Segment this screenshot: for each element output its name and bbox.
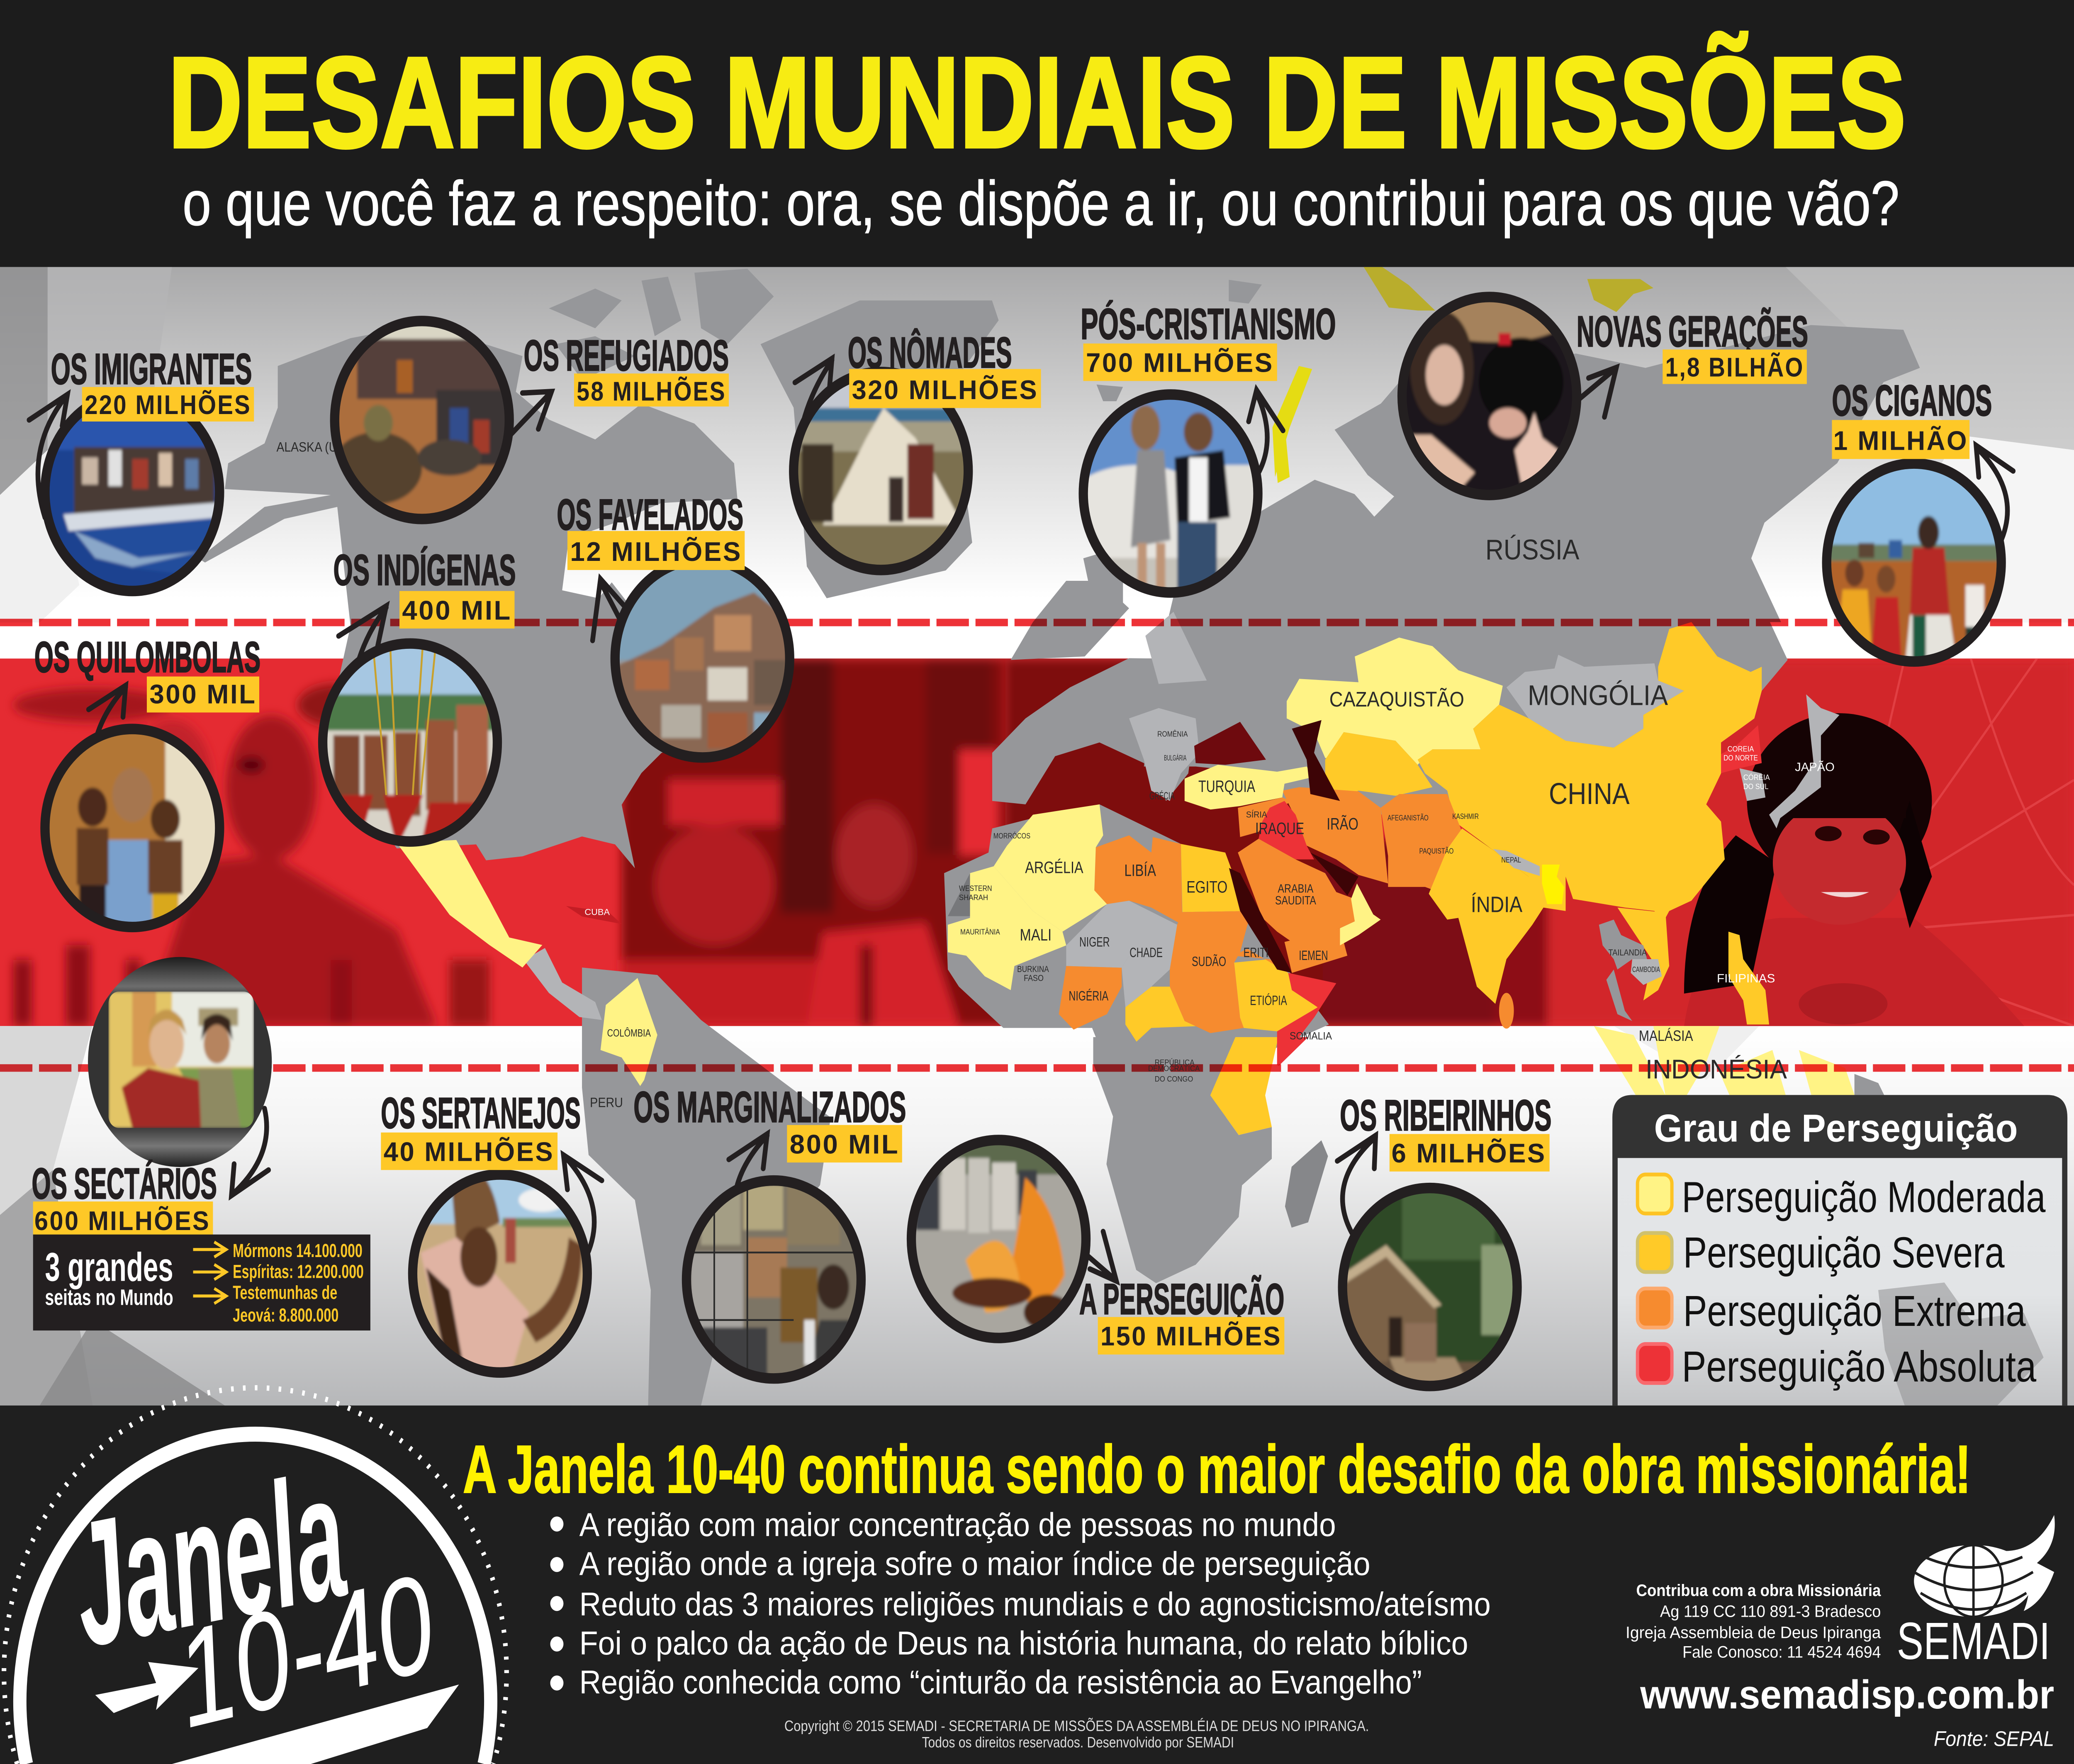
map: country labels: SÍRIA [1246,809,1267,820]
label: os ribeirinhos: OS RIBEIRINHOS [1340,1091,1551,1140]
label: os sectários: 600 MILHÕES [34,1206,210,1236]
map: country labels: CHADE [1130,945,1163,960]
map: country labels: ARABIA [1278,882,1314,895]
map: country labels: ÍNDIA [1471,892,1522,917]
country: Nepal [1493,849,1540,876]
map: Colombia [601,978,657,1086]
map: country labels: JAPÃO [1795,760,1835,774]
panel: upper map background [0,267,2074,660]
map: country labels: MAURITÂNIA [960,928,1000,936]
photo: girl on the right [1684,713,2024,1026]
photo: oceans [1005,658,2074,1026]
label: os indígenas: OS INDÍGENAS [333,546,516,594]
panel: three great sects: Jeová: 8.800.000 [233,1305,338,1326]
arrow: ribeirinhos [1337,1135,1375,1238]
divider: upper dashed line [0,621,2074,624]
label: os imigrantes [51,345,254,422]
label: os quilombolas: 300 MIL [149,679,257,710]
country: Kazakhstan [1287,638,1503,765]
map: country labels: SAUDITA [1275,894,1317,907]
map: country labels: NEPAL [1501,856,1521,864]
country: Syria [1238,797,1292,837]
map: country labels: DO CONGO [1155,1075,1193,1083]
label: os nômades [848,328,1041,408]
subtitle: o que você faz a respeito: ora, se dispõe a ir, ou contribui para os que vão? [183,168,1899,239]
photo circle: os indígenas [317,638,503,848]
panel: three great sects: Espíritas: 12.200.000 [233,1261,364,1282]
panel: red band with photographs [0,658,2074,1026]
country: Libya [1094,835,1182,925]
copyright [784,1718,1369,1751]
divider: lower dashed line [0,1067,2074,1069]
photo circle: os favelados [609,555,800,765]
bullet list: Região conhecida como “cinturão da resistência ao Evangelho” [579,1664,1422,1701]
country: China [1418,622,1762,925]
photo circle: os imigrantes [40,383,225,600]
map: country labels: BULGÁRIA [1164,754,1187,762]
contact details [1626,1581,1882,1661]
country: central Asia [1325,732,1432,801]
map: country labels: ARGÉLIA [1025,858,1083,877]
panel: footer background [0,1406,2074,1764]
photo circle: os nômades [794,372,972,575]
copyright: Todos os direitos reservados. Desenvolvido por SEMADI [922,1734,1234,1751]
label: novas gerações: 1,8 BILHÃO [1665,352,1804,383]
map: country labels: INDONÉSIA [1646,1054,1787,1084]
map: country labels: DO SUL [1743,782,1768,791]
arrow: favelados [593,579,644,666]
country: Iraq [1259,801,1314,860]
arrow: pós-cristianismo [1235,390,1283,501]
legend: grau de perseguição: Grau de Perseguição [1654,1106,2018,1150]
label: pós-cristianismo: PÓS-CRISTIANISMO [1081,300,1336,348]
map: Indonesia [1594,1026,1885,1107]
arrow: sertanejos [563,1155,602,1260]
photo circle: os quilombolas [40,728,225,938]
label: novas gerações: NOVAS GERAÇÕES [1577,307,1808,356]
arrow: nômades [795,358,832,495]
icon: white swoosh [172,1684,459,1764]
label: os nômades: OS NÔMADES [848,328,1012,377]
label: os refugiados [524,331,729,407]
icon: yellow arrows [193,1242,226,1304]
map: country labels: PAQUISTÃO [1419,846,1453,855]
label: a perseguição: A PERSEGUIÇÃO [1079,1275,1284,1323]
country: Sri Lanka [1499,993,1514,1028]
sea: Persian Gulf [1310,853,1358,896]
map: country labels: CUBA [584,907,610,917]
legend: grau de perseguição [1612,1095,2067,1406]
map: Cuba [566,906,622,924]
label: os ciganos [1832,376,1992,459]
contact details: Fale Conosco: 11 4524 4694 [1682,1642,1881,1661]
photo circle: a perseguição [906,1135,1091,1345]
label: os refugiados: 58 MILHÕES [577,376,726,407]
panel: three great sects: 3 grandes [45,1245,173,1290]
label: os sertanejos: 40 MILHÕES [384,1137,554,1167]
map: country labels: EGITO [1186,877,1227,896]
country: Yemen [1285,928,1347,973]
map: Latin America [582,967,831,1406]
copyright: Copyright © 2015 SEMADI - SECRETARIA DE MISSÕES DA ASSEMBLÉIA DE DEUS NO IPIRANGA. [784,1718,1369,1735]
contact details: Igreja Assembleia de Deus Ipiranga [1626,1623,1881,1642]
label: os marginalizados: 800 MIL [790,1129,899,1160]
map: country labels: MALI [1020,926,1052,944]
legend: absolute: Perseguição Absoluta [1682,1342,2036,1391]
label: os indígenas [333,546,516,629]
label: os sertanejos [381,1089,581,1170]
map: country labels: BURKINA [1017,964,1049,974]
map: country labels: COREIA [1728,745,1754,753]
main title: DESAFIOS MUNDIAIS DE MISSÕES [168,31,1906,175]
label: os sertanejos: OS SERTANEJOS [381,1089,581,1137]
map: country labels: NIGER [1079,934,1110,950]
arrow: refugiados [496,392,552,450]
map: Russia and Europe north [1083,280,1920,622]
country: Egypt [1181,844,1251,912]
map: Eurasia and Africa [944,581,1839,1120]
arrow: ciganos [1976,446,2013,546]
photo: red umbrella lines [1888,658,2074,1026]
map: country labels: CHINA [1549,777,1630,811]
photo circle: os ciganos [1823,458,2008,669]
badge: Janela 10-40: 10-40 [165,1545,446,1757]
panel: header background [0,0,2074,267]
photo circle: os refugiados [331,315,516,525]
map: country labels: NIGÉRIA [1069,988,1109,1004]
map: Mexico [397,840,542,967]
sea: Black Sea [1194,722,1266,765]
map: country labels: MORRÓCOS [993,832,1030,840]
label: os imigrantes: OS IMIGRANTES [51,345,252,393]
badge: dotted outer ring [4,1388,506,1764]
country: Somalia [1277,973,1336,1066]
map: country labels: ETIÓPIA [1250,993,1287,1008]
country: India [1429,828,1565,1004]
map: country labels: SOMALIA [1290,1030,1332,1042]
label: os favelados: OS FAVELADOS [557,490,743,539]
country: Mali and Mauritania [948,866,1066,990]
label: os nômades: 320 MILHÕES [852,375,1038,405]
photo: faces on the left [13,684,489,1026]
legend: severe: Perseguição Severa [1683,1228,2005,1277]
arrow: novas gerações [1560,368,1616,417]
country: Bangladesh [1542,865,1564,904]
legend: moderate: Perseguição Moderada [1682,1173,2045,1221]
photo circle: pós-cristianismo [1058,390,1263,603]
photo circle: os sectários [88,957,272,1167]
label: pós-cristianismo [1081,300,1336,381]
label: os ciganos: 1 MILHÃO [1833,426,1968,456]
label: pós-cristianismo: 700 MILHÕES [1086,348,1274,378]
map: country labels: ALASKA (U [276,439,337,455]
map: Central America [524,948,602,1020]
country: Indochina [1617,908,1669,1000]
map: country labels: AFEGANISTÃO [1388,814,1429,822]
label: a perseguição: 150 MILHÕES [1100,1321,1282,1352]
country: Oman [1340,884,1381,945]
country: Afghanistan and Pakistan [1381,794,1462,894]
label: os sectários [32,1160,217,1236]
map: country labels: KASHMIR [1452,812,1479,821]
country: Central African Republic [1125,987,1196,1042]
source: Fonte: SEPAL [1934,1727,2054,1751]
map: country labels: DO NORTE [1723,754,1758,762]
label: os favelados [557,490,745,570]
bullet list: A região com maior concentração de pessoas no mundo [579,1506,1336,1543]
bullet list: Reduto das 3 maiores religiões mundiais e do agnosticismo/ateísmo [579,1586,1491,1623]
map: North Africa grey base [944,804,1329,1120]
map: country labels: CAZAQUISTÃO [1329,687,1464,711]
legend: Australia behind the panel [1878,1282,2044,1406]
map: country labels: IEMEN [1299,948,1328,963]
map: country labels: RÚSSIA [1485,534,1580,565]
bullet list: Foi o palco da ação de Deus na história humana, do relato bíblico [579,1625,1468,1662]
label: os ribeirinhos [1340,1091,1551,1172]
arrow: indígenas [338,606,386,697]
label: os ciganos: OS CIGANOS [1832,376,1992,425]
label: os ribeirinhos: 6 MILHÕES [1392,1138,1546,1169]
photo circle: os sertanejos [410,1162,595,1380]
country: Saudi Arabia [1238,839,1355,942]
country: Nigeria [1059,966,1122,1030]
map: country labels: TAILANDIA [1609,948,1647,958]
map: country labels: WESTERN [959,884,992,893]
label: os imigrantes: 220 MILHÕES [85,390,251,420]
country: Mongolia [1507,655,1684,748]
map: country labels: COLÔMBIA [607,1027,651,1039]
photo: child in the centre [622,658,1005,1026]
arrow: perseguição [1059,1231,1116,1281]
map: country labels: FASO [1024,973,1044,983]
map: country labels: FILIPINAS [1717,972,1775,985]
country: Cambodia [1631,959,1662,985]
map: country labels: DEMOCRÁTICA [1148,1065,1200,1073]
map: persecution colours [948,622,1769,1066]
country: Iran [1282,787,1388,884]
bullet list [550,1506,1491,1701]
map: country labels: PERU [590,1095,623,1110]
badge: Janela 10-40: Janela [60,1436,358,1684]
map: country labels: ERITI [1243,945,1268,960]
map: country labels: IRÃO [1327,814,1358,833]
map: country labels: GRÉCIA [1149,790,1175,802]
label: os indígenas: 400 MIL [402,595,512,626]
label: os marginalizados: OS MARGINALIZADOS [633,1083,906,1131]
badge: Janela 10-40 [4,1388,506,1764]
map: Greenland-side yellow strip [1273,366,1312,483]
sea: Red Sea [1229,868,1292,973]
country: Ethiopia [1234,959,1318,1031]
contact details: Contribua com a obra Missionária [1636,1581,1882,1600]
map: country labels [276,439,1835,1110]
legend: extreme: Perseguição Extrema [1683,1287,2026,1335]
icon: flame [2005,1515,2055,1611]
icon: globe [1914,1545,2033,1617]
badge: white ring [20,1434,491,1764]
label: os quilombolas: OS QUILOMBOLAS [34,633,260,681]
arrow: sectários [231,1109,268,1196]
map: Arctic islands in yellow [1364,267,1653,312]
map: North America [198,269,999,868]
label: os sectários: OS SECTÁRIOS [32,1160,217,1208]
label: novas gerações [1577,307,1808,384]
website: www.semadisp.com.br [1640,1672,2054,1717]
bullet list: A região onde a igreja sofre o maior índice de perseguição [579,1545,1370,1582]
label: os marginalizados [633,1083,906,1162]
label: os quilombolas [34,633,260,712]
map: country labels: TURQUIA [1198,777,1255,796]
map: country labels: IRAQUE [1255,819,1304,838]
label: a perseguição [1079,1275,1284,1355]
arrow: imigrantes [29,395,68,517]
panel: three great sects [33,1235,370,1330]
photo circle: os marginalizados [681,1177,867,1387]
country: Philippines [1728,932,1769,1024]
logo: SEMADI [1897,1515,2055,1670]
country: Eritrea [1233,949,1288,973]
map: country labels: MONGÓLIA [1528,679,1668,711]
panel: three great sects: seitas no Mundo [45,1285,173,1310]
country: Algeria [994,804,1107,932]
label: os favelados: 12 MILHÕES [570,537,742,567]
arrow: quilombolas [89,685,126,795]
photo circle: novas gerações [1397,292,1585,502]
panel: three great sects: Mórmons 14.100.000 [233,1240,363,1262]
country: Sudan [1170,911,1251,1033]
label: os refugiados: OS REFUGIADOS [524,331,729,380]
panel: three great sects: Testemunhas de [233,1282,337,1304]
logo: SEMADI: SEMADI [1897,1612,2050,1670]
photo circle: os ribeirinhos [1336,1185,1529,1399]
icon: white arrow [95,1662,198,1713]
map: world in grey [198,269,1920,1406]
contact details: Ag 119 CC 110 891-3 Bradesco [1660,1602,1881,1620]
panel: lower map background [0,1026,2074,1407]
map: country labels: SUDÃO [1192,954,1226,969]
map: country labels: ROMÊNIA [1157,730,1188,738]
sea: Caspian [1292,720,1340,801]
country: Thailand [1599,920,1647,970]
map: country labels: REPÚBLICA [1155,1058,1195,1067]
country: Malay peninsula [1607,970,1632,1021]
arrow: marginalizados [729,1134,767,1238]
map: country labels: CAMBODIA [1632,965,1660,974]
map: country labels: SHARAH [959,893,988,902]
map: country labels: MALÁSIA [1639,1028,1693,1045]
map: country labels: LIBÍA [1124,861,1156,880]
map: Africa south [1093,1037,1328,1283]
map: country labels: CÓREIA [1743,773,1770,782]
country: Turkey [1185,765,1314,809]
